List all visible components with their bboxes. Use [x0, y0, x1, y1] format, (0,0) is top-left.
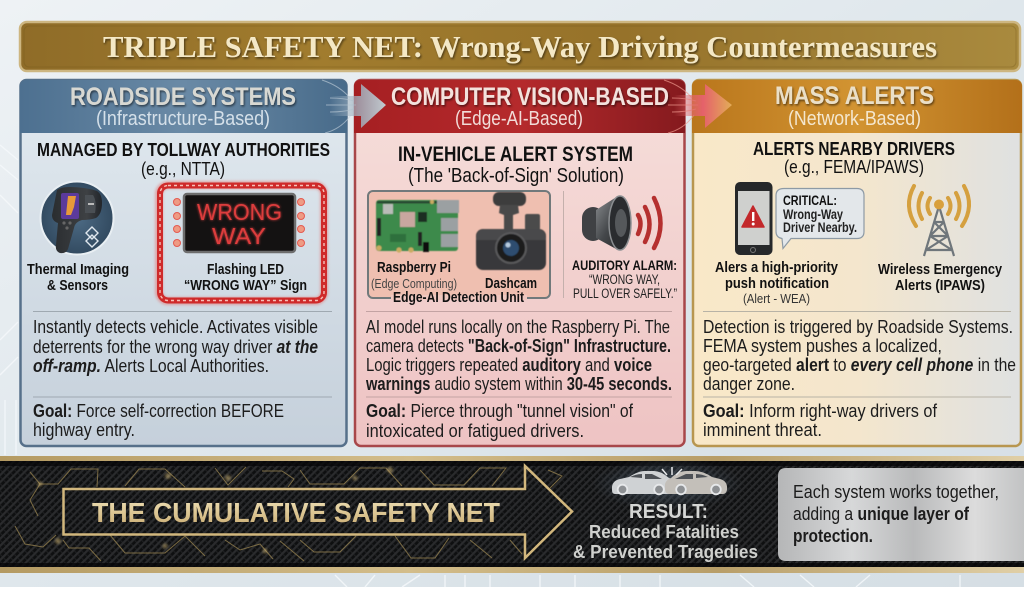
icon: two crashed cars: [592, 458, 744, 510]
panel header: mass alerts: [692, 80, 1022, 133]
arrow: computer vision to mass alerts: [664, 80, 732, 133]
text: roadside goal: Goal: Force self-correction BEFORE: [33, 401, 284, 421]
callout: critical wrong-way driver nearby: CRITICAL:: [783, 193, 837, 208]
text: computer vision description: AI model runs locally on the Raspberry Pi. The: [366, 317, 670, 337]
panel header: mass alerts: (Network-Based): [788, 108, 921, 130]
title banner: [20, 22, 1020, 71]
icon: flashing LED wrong way sign: WRONG: [197, 199, 282, 225]
panel header: computer vision-based: [354, 80, 685, 133]
text: mass alerts description: [703, 317, 1016, 394]
bottom band: cumulative safety net: [0, 456, 1024, 573]
label: wireless emergency alerts: Wireless Emergency: [878, 261, 1003, 278]
callout: each system works together: adding a unique layer of: [793, 503, 970, 524]
label: edge-AI detection unit: Edge-AI Detection Unit: [393, 289, 524, 306]
text: mass alerts goal: Goal: Inform right-way drivers of: [703, 401, 938, 421]
text: mass alerts description: FEMA system pushes a localized,: [703, 336, 942, 356]
panel header: roadside systems: (Infrastructure-Based): [96, 108, 270, 130]
text: roadside goal: highway entry.: [33, 420, 135, 440]
text: result: Reduced Fatalities: [589, 521, 739, 542]
text: computer vision goal: Goal: Pierce through "tunnel vision" of: [366, 401, 634, 421]
text: mass alerts description: geo-targeted alert to every cell phone in the: [703, 355, 1016, 375]
text: pull over safely: PULL OVER SAFELY.”: [573, 286, 677, 301]
label: dashcam: Dashcam: [485, 275, 537, 292]
text: result: & Prevented Tragedies: [573, 541, 758, 562]
subheading: FEMA/IPAWS: (e.g., FEMA/IPAWS): [784, 156, 924, 177]
callout: each system works together: [778, 468, 1024, 561]
icon: flashing LED wrong way sign: [159, 185, 324, 301]
label: wireless emergency alerts: [878, 261, 1003, 294]
text: mass alerts goal: imminent threat.: [703, 420, 822, 440]
text: roadside description: Instantly detects vehicle. Activates visible: [33, 317, 318, 337]
subheading: e.g. NTTA: (e.g., NTTA): [141, 158, 225, 179]
label: edge computing: (Edge Computing): [371, 276, 457, 291]
label: high-priority push notification: Alers a high-priority: [715, 259, 839, 276]
label: high-priority push notification: push notification: [725, 275, 829, 292]
panel header: computer vision-based: (Edge-AI-Based): [455, 108, 583, 130]
heading: managed by tollway authorities: MANAGED BY TOLLWAY AUTHORITIES: [37, 139, 330, 160]
callout: critical wrong-way driver nearby: Driver Nearby.: [783, 220, 857, 235]
edge-AI detection unit box: [368, 191, 550, 306]
subheading: back-of-sign solution: (The 'Back-of-Sign' Solution): [408, 165, 624, 187]
label: high-priority push notification: [715, 259, 839, 306]
panel: roadside systems: [20, 80, 347, 446]
icon: raspberry pi: [376, 200, 459, 253]
label: and sensors: & Sensors: [47, 277, 108, 294]
arrow: the cumulative safety net: [64, 466, 572, 558]
callout: each system works together: protection.: [793, 525, 873, 546]
callout: critical wrong-way driver nearby: [776, 188, 864, 248]
text: computer vision description: [365, 317, 672, 394]
callout: each system works together: Each system works together,: [793, 481, 999, 502]
panel: mass alerts: [692, 80, 1022, 446]
label: thermal imaging: Thermal Imaging: [27, 261, 129, 278]
arrow: roadside to computer vision: [322, 80, 386, 133]
icon: thermal imaging camera: [40, 182, 114, 254]
text: computer vision goal: intoxicated or fatigued drivers.: [366, 421, 584, 441]
panel: computer vision-based: [354, 80, 685, 446]
text: roadside goal: [33, 401, 284, 440]
title: TRIPLE SAFETY NET: Wrong-Way Driving Countermeasures: [103, 29, 937, 64]
text: mass alerts description: danger zone.: [703, 374, 795, 394]
text: roadside description: [33, 317, 318, 376]
label: raspberry pi: Raspberry Pi: [377, 259, 451, 276]
heading: alerts nearby drivers: ALERTS NEARBY DRIVERS: [753, 138, 955, 159]
panel header: roadside systems: ROADSIDE SYSTEMS: [70, 83, 296, 111]
panel header: computer vision-based: COMPUTER VISION-BASED: [391, 83, 669, 111]
label: wireless emergency alerts: Alerts (IPAWS): [895, 277, 985, 294]
text: result: [573, 500, 758, 562]
text: computer vision description: Logic triggers repeated auditory and voice: [366, 355, 652, 375]
text: result: RESULT:: [629, 500, 708, 523]
arrow: the cumulative safety net: THE CUMULATIVE SAFETY NET: [92, 497, 500, 528]
text: mass alerts goal: [703, 401, 938, 440]
label: flashing LED: Flashing LED: [207, 261, 284, 278]
panel header: mass alerts: MASS ALERTS: [775, 82, 934, 110]
icon: phone with alert: [735, 182, 772, 255]
icon: wireless tower: [909, 186, 969, 256]
text: computer vision description: camera detects "Back-of-Sign" Infrastructure.: [366, 336, 671, 356]
text: wrong way: “WRONG WAY,: [589, 272, 660, 287]
label: wrong way sign: “WRONG WAY” Sign: [184, 277, 307, 294]
text: computer vision goal: [366, 401, 634, 441]
icon: dashcam: [476, 192, 546, 270]
text: computer vision description: warnings audio system within 30-45 seconds.: [365, 374, 672, 394]
heading: in-vehicle alert system: IN-VEHICLE ALERT SYSTEM: [398, 143, 633, 166]
callout: critical wrong-way driver nearby: Wrong-Way: [783, 207, 843, 222]
icon: flashing LED wrong way sign: WAY: [212, 223, 266, 249]
label: high-priority push notification: (Alert - WEA): [743, 291, 810, 306]
label: auditory alarm: AUDITORY ALARM:: [572, 258, 677, 273]
text: roadside description: off-ramp. Alerts Local Authorities.: [33, 356, 269, 376]
text: roadside description: deterrents for the wrong way driver at the: [33, 337, 318, 357]
icon: speaker with sound waves: [582, 196, 660, 250]
panel header: roadside systems: [20, 80, 347, 133]
